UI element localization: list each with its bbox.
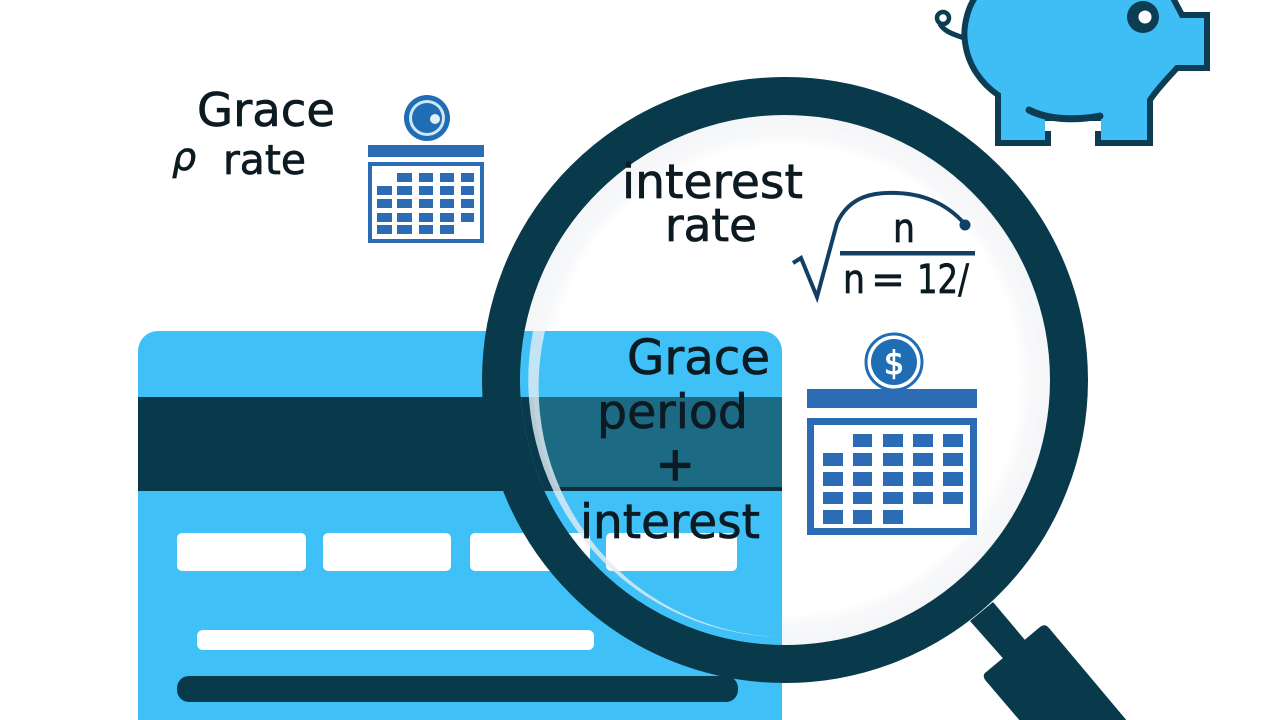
top-left label: Grace rate: ρ	[172, 135, 196, 179]
lens label: Grace period + interest: +	[656, 437, 695, 491]
formula: radical with fraction: =	[871, 257, 905, 303]
magnifying glass handle	[970, 602, 1128, 720]
dark stripe seen between rim and highlight	[521, 397, 556, 491]
formula: radical with fraction	[793, 193, 975, 303]
card number fields	[177, 533, 737, 571]
formula: radical with fraction: n	[893, 206, 915, 252]
formula: radical with fraction: 12/	[917, 257, 969, 303]
magnifying glass rim	[501, 96, 1069, 664]
icon: large calendar with dollar coin: $	[884, 344, 904, 382]
lens label: interest rate	[622, 155, 803, 252]
lens label: Grace period + interest	[580, 330, 770, 550]
top-left label: Grace rate	[172, 83, 335, 184]
formula: radical with fraction: n	[843, 257, 865, 303]
lens label: Grace period + interest: interest	[580, 495, 760, 550]
lens label: Grace period + interest: Grace	[627, 330, 770, 386]
lens highlight crescent	[528, 331, 778, 637]
piggy bank icon	[937, 0, 1207, 143]
card name line	[197, 630, 594, 650]
lens label: interest rate: rate	[665, 199, 757, 252]
lens label: Grace period + interest: period	[597, 385, 748, 440]
panel: magnifying glass lens contents	[520, 115, 1050, 645]
magnified card	[520, 331, 782, 645]
card dark bar	[177, 676, 738, 702]
top-left label: Grace rate: rate	[223, 136, 306, 184]
card magnetic stripe	[138, 397, 782, 491]
lens label: interest rate: interest	[622, 155, 803, 210]
panel: credit card	[138, 331, 782, 720]
icon: large calendar with dollar coin	[807, 334, 977, 532]
top-left label: Grace rate: Grace	[197, 83, 335, 137]
icon: small calendar with coin	[368, 95, 484, 241]
